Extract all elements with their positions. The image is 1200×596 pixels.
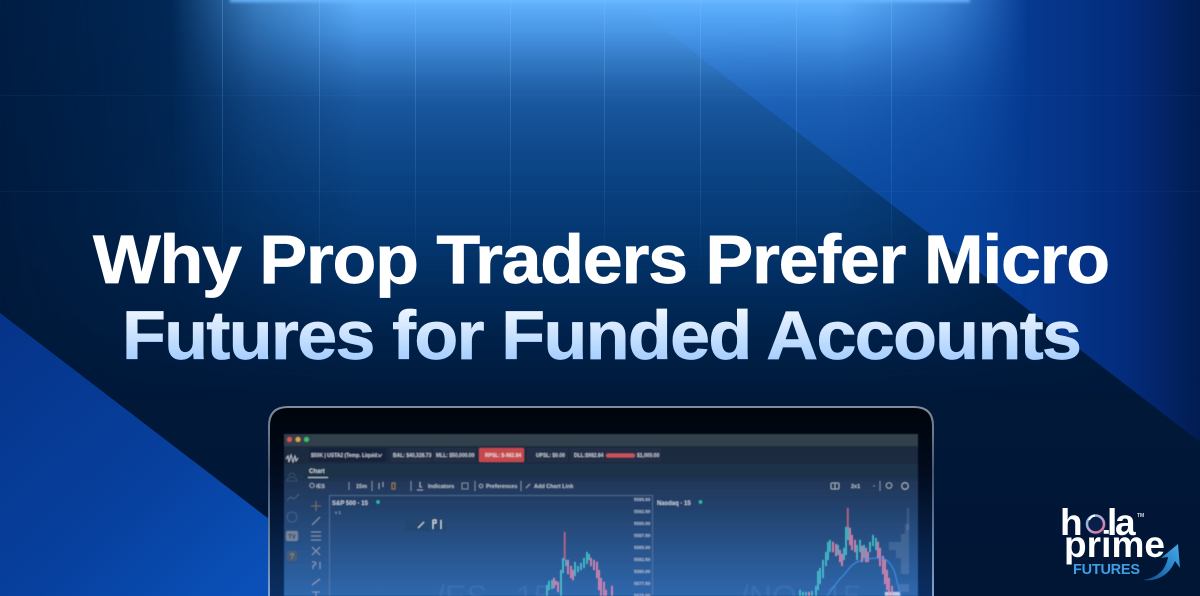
logo word: futures: FUTURES bbox=[1073, 562, 1140, 578]
S&P 500 chart panel: S&P 500 · 15 bbox=[332, 501, 369, 507]
account status bar: DLL:$982.84 bbox=[574, 453, 604, 459]
Nasdaq chart panel bbox=[657, 500, 909, 596]
price axis: 5585.00 bbox=[634, 545, 651, 550]
left navigation sidebar: TV bbox=[288, 534, 296, 540]
price axis: 5582.50 bbox=[634, 557, 651, 562]
S&P 500 chart panel: v 1 bbox=[335, 510, 342, 515]
price axis: 5595.00 bbox=[634, 497, 651, 502]
window title bar bbox=[284, 434, 918, 446]
chart toolbar: Indicators bbox=[428, 484, 454, 490]
moving average line bbox=[827, 558, 901, 596]
laptop mockup bbox=[269, 407, 933, 596]
title bbox=[93, 220, 1110, 374]
laptop frame bbox=[269, 407, 933, 596]
price axis: 5590.00 bbox=[634, 521, 651, 526]
account status bar: $1,000.00 bbox=[637, 453, 659, 459]
trading platform screen bbox=[284, 434, 918, 596]
logo bubble bbox=[1086, 514, 1106, 534]
tabs row: Chart bbox=[309, 469, 325, 475]
price axis: 5587.50 bbox=[634, 533, 651, 538]
account status bar: MLL: $50,000.00 bbox=[436, 453, 475, 459]
chart toolbar: 2x1 bbox=[851, 484, 860, 490]
left navigation sidebar: ? bbox=[290, 552, 295, 561]
price axis: 5577.50 bbox=[634, 581, 651, 586]
chart toolbar bbox=[310, 481, 908, 491]
logo trademark: TM bbox=[1137, 513, 1144, 519]
chart toolbar: Add Chart Link bbox=[534, 484, 574, 490]
price axis: 5592.50 bbox=[634, 509, 651, 514]
account status bar bbox=[284, 446, 918, 464]
background glow: top spotlight bbox=[178, 0, 1019, 278]
logo word: hola: hola bbox=[1060, 502, 1136, 543]
drawing tools column bbox=[311, 501, 321, 596]
account status bar: RPSL: $-982.84 bbox=[485, 453, 521, 459]
S&P 500 chart panel bbox=[330, 496, 652, 596]
logo word: prime: prime bbox=[1064, 524, 1165, 565]
Nasdaq candlesticks bbox=[800, 508, 892, 596]
left navigation sidebar bbox=[286, 455, 299, 561]
chart toolbar: 15m bbox=[356, 484, 367, 490]
floating drawing toolbar bbox=[405, 516, 446, 531]
price axis: 5580.00 bbox=[634, 569, 651, 574]
volume profile bbox=[889, 508, 909, 592]
title line 2: Futures for Funded Accounts bbox=[122, 296, 1082, 374]
Nasdaq chart panel: Nasdaq · 15 bbox=[657, 501, 691, 507]
chart toolbar: Preferences bbox=[486, 484, 518, 490]
account status bar: UPSL: $0.00 bbox=[536, 453, 565, 459]
background panel: lower left blue wedge bbox=[0, 313, 380, 596]
logo: hola prime futures bbox=[1060, 502, 1180, 580]
S&P candlesticks bbox=[547, 532, 612, 596]
chart toolbar: /ES bbox=[316, 484, 325, 490]
title line 1: Why Prop Traders Prefer Micro bbox=[93, 220, 1110, 298]
account status bar: $50K | USTA2 (Temp. Liquid... bbox=[311, 453, 382, 459]
icon: growth arrow bbox=[1143, 544, 1180, 580]
price axis bbox=[634, 497, 651, 596]
background panel: upper right blue wedge bbox=[626, 0, 1200, 442]
account status bar: BAL: $40,328.73 bbox=[393, 453, 432, 459]
tabs row bbox=[304, 464, 918, 478]
